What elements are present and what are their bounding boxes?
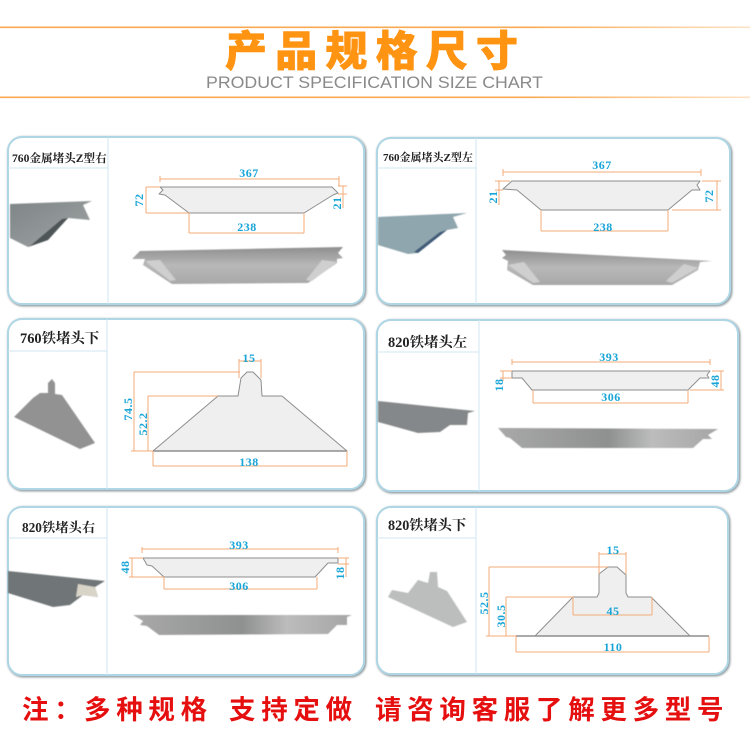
product photo	[388, 572, 467, 627]
dimension drawing	[121, 351, 347, 469]
dimension drawing: 48	[118, 560, 132, 574]
dimension drawing: 52.5	[477, 592, 491, 614]
product photo	[378, 213, 467, 254]
panel: 820 iron end cap right	[8, 507, 365, 676]
dimension drawing: 72	[702, 190, 716, 202]
panel title: 760金属堵头Z型右	[12, 151, 107, 165]
dimension drawing: 238	[593, 220, 613, 234]
sheet photo	[502, 250, 712, 285]
title: 产品规格尺寸	[225, 28, 526, 75]
dimension drawing: 306	[229, 579, 249, 593]
footer note: 请咨询客服了解更多型号	[375, 695, 729, 725]
panel title: 760金属堵头Z型左	[383, 150, 473, 164]
product photo	[10, 201, 92, 247]
dimension drawing: 21	[486, 190, 500, 204]
dimension drawing: 15	[606, 543, 620, 557]
dimension drawing: 21	[330, 196, 344, 210]
dimension drawing: 48	[708, 374, 722, 388]
dimension drawing: 393	[599, 350, 619, 364]
footer note: 支持定做	[229, 695, 358, 725]
footer note: 多种规格	[84, 695, 213, 725]
dimension drawing: 367	[239, 166, 259, 180]
dimension drawing	[132, 166, 347, 234]
dimension drawing: 306	[601, 390, 621, 404]
panel: 760 metal end cap Z left	[377, 138, 731, 305]
dimension drawing: 45	[606, 604, 620, 618]
dimension drawing	[492, 350, 724, 404]
dimension drawing	[118, 538, 349, 593]
subtitle: PRODUCT SPECIFICATION SIZE CHART	[206, 73, 543, 92]
product photo	[378, 401, 475, 433]
dimension drawing: 393	[229, 538, 249, 552]
panel title: 820铁堵头下	[388, 517, 467, 534]
dimension drawing: 238	[237, 220, 257, 234]
dimension drawing: 52.2	[136, 412, 150, 436]
dimension drawing: 30.5	[494, 604, 508, 628]
panel: 820 iron end cap left	[377, 320, 739, 492]
dimension drawing: 15	[242, 351, 256, 365]
panel: 820 iron end cap bottom	[377, 507, 729, 675]
header: bottom rule	[0, 96, 750, 98]
dimension drawing: 138	[239, 455, 259, 469]
panel: 760 metal end cap Z right	[8, 137, 365, 305]
product photo	[14, 379, 95, 449]
sheet photo	[498, 428, 718, 448]
panel title: 760铁堵头下	[20, 329, 100, 347]
dimension drawing: 18	[492, 378, 506, 392]
product photo	[8, 571, 105, 607]
panel title: 820铁堵头左	[388, 333, 467, 351]
sheet photo	[132, 247, 343, 284]
dimension drawing: 367	[592, 158, 612, 172]
dimension drawing: 72	[132, 194, 146, 206]
dimension drawing	[477, 543, 709, 654]
dimension drawing: 74.5	[121, 398, 135, 420]
dimension drawing: 110	[604, 640, 622, 654]
panel title: 820铁堵头右	[22, 519, 95, 535]
footer note: 注：	[22, 695, 86, 725]
dimension drawing	[486, 158, 721, 234]
dimension drawing: 18	[333, 566, 347, 580]
panel: 760 iron end cap bottom	[8, 319, 365, 490]
sheet photo	[133, 615, 352, 635]
footer note	[22, 695, 729, 725]
header: top rule	[0, 26, 750, 28]
